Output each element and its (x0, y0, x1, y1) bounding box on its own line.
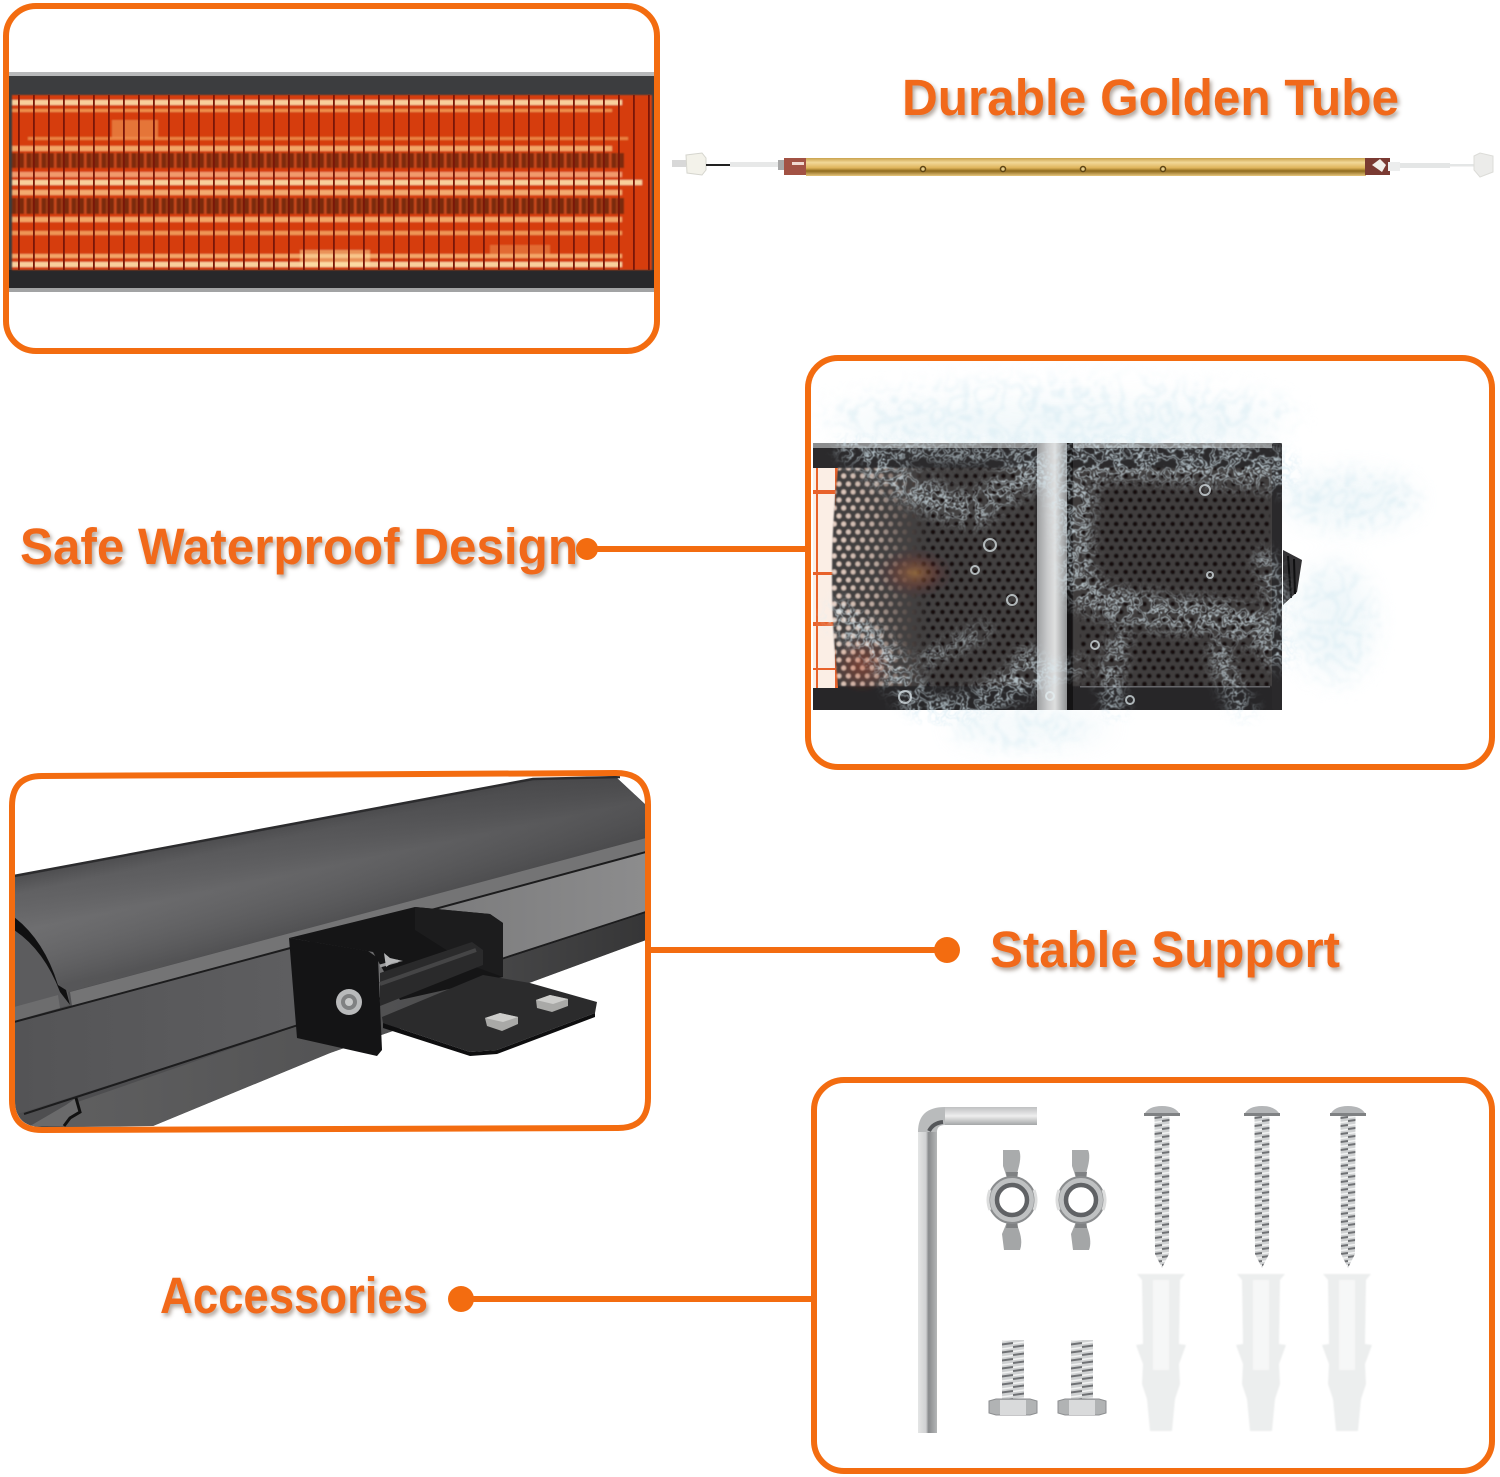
water splashes (838, 446, 1280, 713)
illustration: golden heating tube (672, 153, 1493, 177)
icon: wall anchors (1136, 1274, 1372, 1431)
water mist and heater body (813, 379, 1420, 748)
panel: accessories kit (814, 1080, 1492, 1471)
orange frame (6, 6, 657, 351)
heater housing (9, 72, 657, 292)
icon: hex bolts (989, 1340, 1106, 1415)
orange frame (814, 1080, 1492, 1471)
orange frame (808, 358, 1492, 767)
wall bracket (289, 907, 597, 1056)
icon: wing nuts (988, 1150, 1105, 1250)
heater body and bracket (14, 777, 646, 1128)
panel: mounting bracket photo (12, 773, 648, 1130)
connector: stable support label to panel (648, 937, 960, 963)
heading: stable support: Stable Support (990, 921, 1340, 978)
icon: allen key (918, 1107, 1037, 1433)
panel: infrared heating element close-up (6, 6, 657, 351)
heading: safe waterproof design: Safe Waterproof Design (20, 518, 578, 575)
heading: durable golden tube: Durable Golden Tube (902, 69, 1399, 126)
connector: accessories label to panel (448, 1286, 816, 1312)
panel: waterproof heater photo (808, 358, 1492, 767)
heading: accessories: Accessories (160, 1267, 428, 1324)
icon: wall screws (1144, 1106, 1366, 1268)
orange frame (12, 773, 648, 1130)
connector: waterproof label to panel (576, 538, 809, 560)
